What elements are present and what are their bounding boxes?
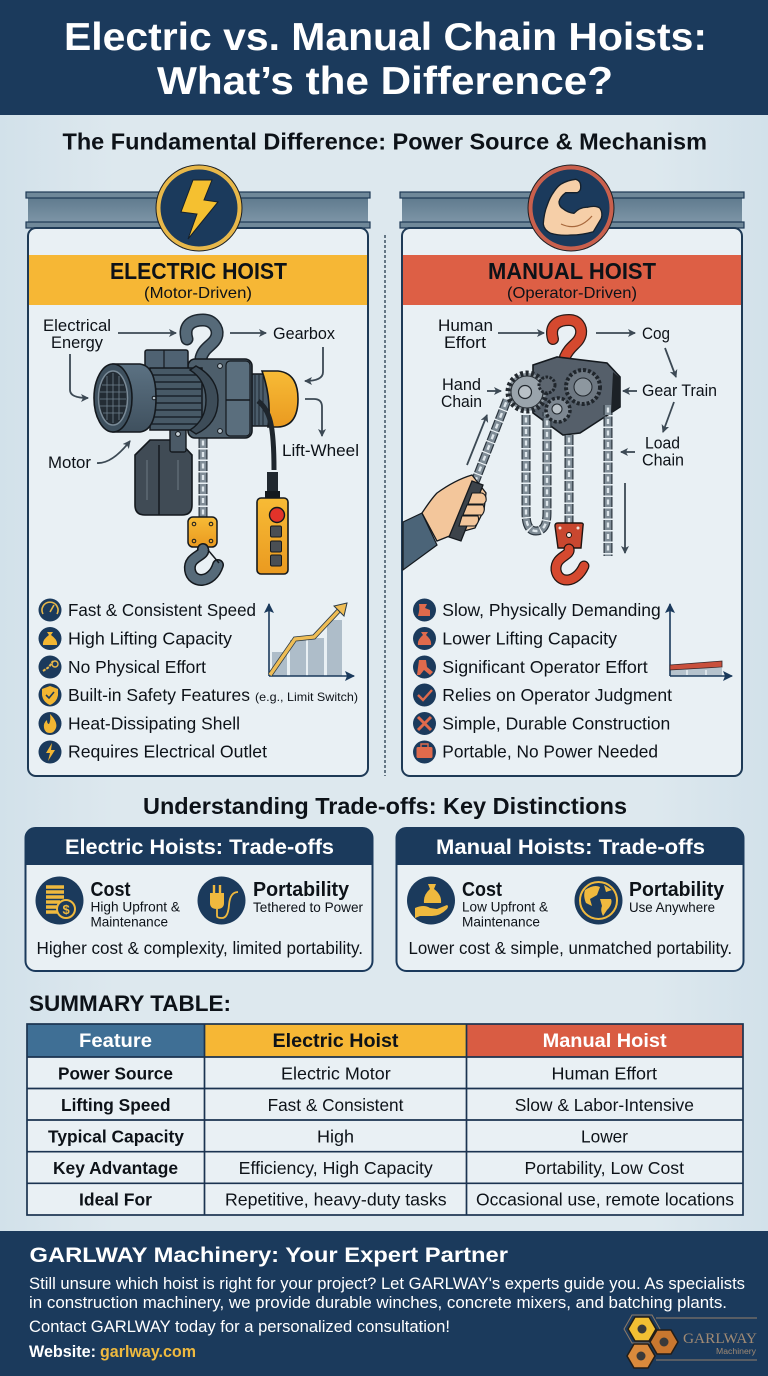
text: manual cost — [462, 879, 549, 930]
website line: garlway.com — [100, 1343, 196, 1361]
chart: electric rising performance — [269, 603, 354, 676]
row: power source: Electric Motor — [281, 1063, 391, 1083]
feature: heat: Heat-Dissipating Shell — [68, 714, 240, 734]
red top hook — [552, 320, 581, 357]
labels: manual diagram: Human — [438, 316, 493, 335]
labels: manual diagram: Hand — [442, 375, 481, 394]
row: typical capacity: High — [317, 1126, 354, 1146]
feature: operator effort: Significant Operator Effort — [442, 657, 648, 677]
header: manual trade-offs: Manual Hoists: Trade-offs — [436, 836, 705, 859]
gearbox housing — [188, 359, 252, 438]
arrows: electric diagram — [70, 333, 323, 463]
text: manual portability — [629, 879, 725, 915]
motor body — [94, 350, 218, 434]
feature: operator judgment: Relies on Operator Judgment — [442, 685, 672, 705]
header: manual trade-offs — [396, 828, 744, 865]
arrows: manual diagram — [467, 333, 676, 553]
header banner — [0, 0, 768, 115]
feature: outlet: Requires Electrical Outlet — [68, 742, 267, 762]
row: ideal for: Occasional use, remote locations — [476, 1190, 734, 1210]
labels: manual diagram: Gear Train — [642, 381, 717, 400]
labels: electric diagram: Gearbox — [273, 324, 335, 343]
footer body: Still unsure which hoist is right for your project? Let GARLWAY's experts guide you. As specialists — [29, 1275, 745, 1293]
labels: manual diagram — [438, 316, 717, 470]
title: What’s the Difference? — [157, 60, 613, 103]
text: electric cost: Maintenance — [90, 914, 168, 930]
band: electric hoist: ELECTRIC HOIST — [110, 258, 287, 284]
website line — [29, 1343, 196, 1361]
bottom hook block and hook — [188, 517, 219, 580]
feature list: electric — [38, 598, 358, 764]
text: electric portability — [253, 879, 363, 915]
panel: manual hoist — [400, 164, 744, 776]
icon: coins: $ — [62, 902, 70, 917]
row: typical capacity — [48, 1126, 628, 1146]
row: ideal for — [79, 1190, 734, 1210]
row: ideal for: Ideal For — [79, 1190, 152, 1210]
footer body — [29, 1275, 745, 1336]
labels: manual diagram: Load — [645, 434, 680, 452]
hand and sleeve — [403, 475, 486, 570]
table header row: Feature — [79, 1031, 152, 1052]
title: Electric vs. Manual Chain Hoists: — [64, 16, 707, 59]
feature: safety: Built-in Safety Features — [68, 685, 250, 705]
illustration: manual hoist — [403, 320, 620, 580]
labels: electric diagram — [43, 316, 359, 472]
steel beam: manual — [400, 192, 744, 228]
labels: electric diagram: Motor — [48, 453, 91, 472]
title — [64, 16, 707, 103]
feature: lower capacity: Lower Lifting Capacity — [442, 628, 617, 648]
table header row — [79, 1031, 667, 1052]
feature: capacity: High Lifting Capacity — [68, 628, 232, 648]
panel: electric hoist — [26, 164, 370, 776]
summary table — [27, 1024, 743, 1215]
row: ideal for: Repetitive, heavy-duty tasks — [225, 1190, 447, 1210]
brake housing — [135, 428, 192, 515]
labels: electric diagram: Lift-Wheel — [282, 441, 359, 460]
band: electric hoist — [29, 255, 367, 305]
icon: globe — [574, 876, 622, 924]
labels: manual diagram: Effort — [444, 333, 486, 352]
logo: GARLWAY — [624, 1315, 757, 1368]
icon: lightning bolt — [156, 164, 242, 252]
feature list: manual — [413, 598, 672, 764]
website line: Website: — [29, 1343, 96, 1361]
row: key advantage: Efficiency, High Capacity — [239, 1158, 433, 1178]
row: lifting speed: Lifting Speed — [61, 1095, 171, 1115]
panel: electric trade-offs — [26, 828, 372, 971]
labels: manual diagram: Chain — [441, 392, 482, 411]
section heading: fundamental difference: The Fundamental Difference: Power Source & Mechanism — [62, 128, 707, 154]
footer heading: GARLWAY Machinery: Your Expert Partner — [30, 1243, 509, 1267]
row: key advantage: Portability, Low Cost — [524, 1158, 684, 1178]
labels: electric diagram: Energy — [51, 333, 103, 352]
panel: manual trade-offs — [396, 828, 744, 971]
row: lifting speed — [61, 1095, 694, 1115]
panel card: electric — [28, 228, 368, 776]
row: power source — [58, 1063, 657, 1083]
row: power source: Power Source — [58, 1063, 173, 1083]
row: typical capacity: Typical Capacity — [48, 1126, 184, 1146]
footer body: Contact GARLWAY today for a personalized consultation! — [29, 1318, 450, 1336]
feature: speed: Fast & Consistent Speed — [68, 600, 256, 620]
text: electric cost — [90, 879, 181, 930]
table header row: Manual Hoist — [543, 1031, 667, 1052]
icon: coins — [36, 876, 84, 924]
text: electric portability: Tethered to Power — [253, 899, 363, 915]
steel beam: electric — [26, 192, 370, 228]
text: electric cost: Cost — [90, 879, 131, 901]
text: electric portability: Portability — [253, 879, 350, 901]
row: key advantage — [53, 1158, 684, 1178]
feature: effort: No Physical Effort — [68, 657, 206, 677]
header: electric trade-offs — [26, 828, 372, 865]
icon: money bag in hand — [407, 876, 455, 924]
row: key advantage: Key Advantage — [53, 1158, 178, 1178]
labels: electric diagram: Electrical — [43, 316, 111, 335]
text: manual portability: Portability — [629, 879, 725, 901]
text: manual cost: Cost — [462, 879, 502, 901]
dashed divider — [384, 235, 386, 776]
logo: GARLWAY: GARLWAY — [683, 1331, 757, 1347]
summary: manual trade-offs: Lower cost & simple, unmatched portability. — [408, 938, 732, 958]
feature: portable: Portable, No Power Needed — [442, 742, 658, 762]
band: manual hoist: (Operator-Driven) — [507, 285, 637, 302]
feature: safety — [38, 684, 358, 706]
text: manual portability: Use Anywhere — [629, 899, 715, 915]
footer body: in construction machinery, we provide durable winches, concrete mixers, and batching plants. — [29, 1294, 727, 1312]
icon: flexed arm — [528, 164, 614, 252]
panel card: manual — [402, 228, 742, 776]
hoist body — [533, 357, 620, 435]
band: electric hoist: (Motor-Driven) — [144, 285, 252, 302]
feature: safety: (e.g., Limit Switch) — [255, 690, 358, 704]
band: manual hoist: MANUAL HOIST — [488, 258, 656, 284]
text: electric cost: High Upfront & — [90, 899, 181, 915]
logo: GARLWAY: Machinery — [716, 1347, 756, 1356]
text: manual cost: Low Upfront & — [462, 899, 549, 915]
feature: slow: Slow, Physically Demanding — [442, 600, 661, 620]
footer — [0, 1231, 768, 1376]
table grid — [27, 1024, 743, 1215]
chart: manual flat performance — [670, 604, 732, 676]
yellow lift wheel — [250, 371, 298, 427]
table header row: Electric Hoist — [272, 1031, 399, 1052]
feature: durable construction: Simple, Durable Construction — [442, 714, 670, 734]
table background and header cells — [27, 1024, 743, 1215]
icon: plug — [198, 876, 246, 924]
row: power source: Human Effort — [552, 1063, 657, 1083]
electric hoist load chain — [198, 438, 208, 518]
row: lifting speed: Fast & Consistent — [268, 1095, 404, 1115]
heading: summary table: SUMMARY TABLE: — [29, 991, 231, 1016]
section heading: trade-offs: Understanding Trade-offs: Key Distinctions — [143, 793, 627, 819]
control cable — [258, 401, 274, 470]
band: manual hoist — [403, 255, 741, 305]
text: manual cost: Maintenance — [462, 914, 540, 930]
header: electric trade-offs: Electric Hoists: Trade-offs — [65, 836, 334, 859]
control pendant — [257, 472, 288, 574]
labels: manual diagram: Chain — [642, 450, 684, 470]
illustration: electric hoist — [94, 320, 298, 580]
summary: electric trade-offs: Higher cost & complexity, limited portability. — [36, 938, 363, 958]
row: lifting speed: Slow & Labor-Intensive — [515, 1095, 694, 1115]
labels: manual diagram: Cog — [642, 324, 670, 343]
manual chains — [475, 400, 608, 556]
row: typical capacity: Lower — [581, 1126, 628, 1146]
red hook block and hook — [555, 523, 584, 580]
gears — [508, 370, 620, 422]
top hook — [186, 320, 217, 358]
